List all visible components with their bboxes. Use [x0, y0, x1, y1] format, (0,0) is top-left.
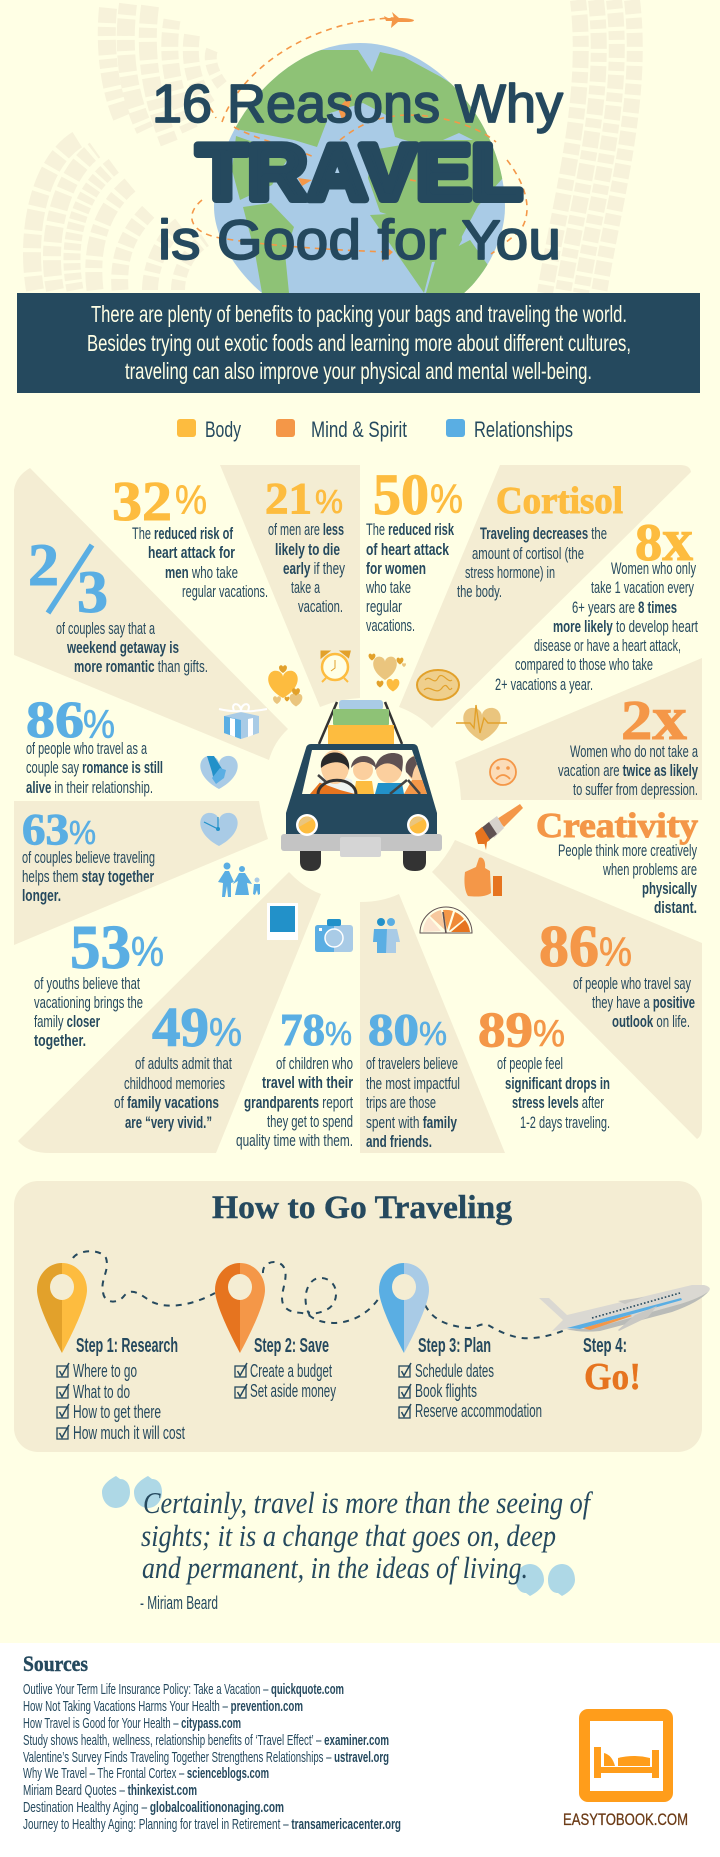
stat: 53%: [34, 914, 164, 1050]
title: TRAVEL: [197, 128, 522, 216]
stat: Cortisol: stress hormone) in: [465, 563, 555, 582]
car: left headlight: [296, 814, 318, 836]
sources: [23, 1651, 401, 1833]
sources: Sources: [23, 1651, 88, 1676]
sources: How Not Taking Vacations Harms Your Health – prevention.com: [23, 1699, 303, 1715]
stat: 49%: childhood memories: [124, 1074, 225, 1093]
stat: 80%: 80: [368, 1005, 419, 1055]
pin 3: [379, 1263, 429, 1353]
stat: 21%: likely to die: [275, 540, 340, 559]
car: bumper: [281, 834, 442, 851]
stat: 50%: 50: [373, 462, 429, 527]
icon: beige hearts: [369, 654, 406, 692]
stat: 49%: of adults admit that: [135, 1054, 232, 1073]
car: luggage blue: [339, 700, 383, 710]
stat: 8x: 8x: [635, 507, 693, 573]
dashed route 3: [425, 1305, 565, 1338]
sources: Study shows health, wellness, relationship benefits of ‘Travel Effect’ – examiner.com: [23, 1733, 389, 1749]
legend: Mind & Spirit: [311, 417, 407, 442]
stat: 86% couples: couple say romance is still: [26, 758, 163, 777]
stat: 50%: The reduced risk: [366, 520, 454, 539]
stat: 32%: 32: [112, 471, 172, 533]
stat: 49%: [114, 997, 242, 1132]
step 3: [399, 1335, 542, 1421]
stat: 86% outlook: 86: [539, 913, 599, 979]
car: license plate: [340, 837, 381, 857]
closing quotation marks: [516, 1564, 575, 1596]
quote: [102, 1476, 594, 1613]
icon: flight arrow 2: [338, 94, 352, 120]
stat: 50%: for women: [366, 559, 426, 578]
step 2: Step 2: Save: [254, 1335, 329, 1357]
stat: 78%: %: [325, 1015, 352, 1052]
car: right headlight: [407, 814, 429, 836]
sources: How Travel is Good for Your Health – citypass.com: [23, 1716, 241, 1732]
stat: 2/3: weekend getaway is: [66, 638, 179, 657]
icon: thumbs up: [464, 857, 502, 897]
stat: 32%: men who take: [165, 563, 238, 582]
icon: yellow hearts: [268, 665, 302, 706]
icon: heartbeat heart: [456, 705, 507, 741]
stat: 49%: of family vacations: [114, 1093, 219, 1112]
sunburst panels: [14, 465, 702, 1153]
stat: 63%: %: [69, 814, 96, 851]
icon: couple: [373, 918, 400, 953]
icon: brain: [417, 670, 459, 700]
stat: 80%: [366, 1005, 460, 1151]
stat: 50%: vacations.: [366, 616, 415, 635]
stat: 8x: 6+ years are 8 times: [572, 598, 677, 617]
stat: 32%: The reduced risk of: [132, 524, 233, 543]
icon: camera: [315, 919, 353, 952]
stat: 89%: stress levels after: [512, 1093, 604, 1112]
stat: 32%: %: [175, 477, 207, 523]
stat: 78%: travel with their: [262, 1073, 353, 1092]
step 1: What to do: [73, 1381, 130, 1402]
dashed route 1: [73, 1251, 215, 1306]
stat: 86% couples: [26, 692, 163, 797]
flight paths: [192, 18, 527, 254]
stat: 32%: heart attack for: [148, 543, 235, 562]
stat: 21%: 21: [265, 474, 312, 523]
stat: 50%: %: [430, 476, 463, 522]
stat: 21%: [265, 474, 345, 616]
legend: Relationships: [474, 417, 573, 442]
panel: how to go traveling: [14, 1181, 710, 1452]
step 3: Step 3: Plan: [418, 1335, 491, 1357]
car: passengers: [310, 750, 431, 794]
step 1: [57, 1335, 185, 1443]
step 1: Step 1: Research: [76, 1335, 178, 1357]
icon: gift: [219, 704, 267, 739]
icon: flight arrow 1: [382, 244, 393, 262]
stat: 78%: 78: [280, 1005, 325, 1055]
icon: family car: [281, 700, 442, 871]
stat: 89%: 89: [478, 1001, 533, 1057]
step 4: Go!: [584, 1356, 641, 1398]
intro banner: [17, 293, 700, 393]
quote: sights; it is a change that goes on, deep: [141, 1518, 556, 1553]
stat: 2/3: 3: [77, 559, 108, 625]
stat: 2x: 2x: [621, 685, 687, 753]
stat: 2/3: of couples say that a: [56, 619, 155, 638]
stat: 2/3: more romantic than gifts.: [74, 657, 208, 676]
opening quotation marks: [102, 1476, 162, 1508]
step 2: Create a budget: [250, 1360, 332, 1381]
sources: Why We Travel – The Frontal Cortex – scienceblogs.com: [23, 1766, 269, 1782]
stat: 8x: [495, 507, 698, 694]
stat: Cortisol: Cortisol: [496, 480, 623, 522]
stat: 49%: %: [209, 1011, 242, 1055]
stat: 53%: of youths believe that: [34, 974, 140, 993]
stat: 53%: together.: [34, 1031, 86, 1050]
stat: 49%: 49: [152, 997, 209, 1059]
stat: 89%: 1-2 days traveling.: [520, 1113, 610, 1132]
step 2: Set aside money: [250, 1380, 336, 1401]
stat: 86% couples: of people who travel as a: [26, 739, 147, 758]
step 1: How much it will cost: [73, 1422, 185, 1443]
car: right wheel: [403, 851, 426, 871]
stat: 32%: [112, 471, 268, 601]
step 1: How to get there: [73, 1401, 161, 1422]
title: is Good for You: [158, 208, 561, 271]
sources: Valentine’s Survey Finds Traveling Together Strengthens Relationships – ustravel.org: [23, 1750, 389, 1766]
stat: 80%: %: [419, 1015, 447, 1052]
title: 16 Reasons Why: [152, 74, 563, 134]
stat: 21%: %: [315, 483, 343, 520]
icon: airplane: [384, 12, 414, 28]
stat: 80%: spent with family: [366, 1113, 457, 1132]
stat: 89%: %: [533, 1013, 565, 1055]
stat: Creativity: [536, 806, 699, 917]
stat: 80%: of travelers believe: [366, 1054, 458, 1073]
stat: 53%: vacationing brings the: [34, 993, 143, 1012]
sources: Journey to Healthy Aging: Planning for travel in Retirement – transamericacenter.org: [23, 1817, 401, 1833]
stat: 80%: and friends.: [366, 1132, 432, 1151]
stat: 78%: of children who: [276, 1054, 353, 1073]
stat: 53%: %: [131, 928, 164, 975]
step 3: Reserve accommodation: [415, 1400, 542, 1421]
stat: 63%: of couples believe traveling: [22, 848, 155, 867]
stat: 53%: family closer: [34, 1012, 100, 1031]
icon: holding hands heart: [200, 756, 238, 789]
icon: flight arrow 3: [298, 178, 312, 186]
step 1: Where to go: [73, 1360, 137, 1381]
stat: Creativity: Creativity: [536, 806, 699, 845]
background footprints: [32, 0, 635, 293]
stat: 53%: 53: [70, 914, 131, 982]
stat: 2x: [558, 685, 698, 799]
stat: Cortisol: Traveling decreases the: [480, 524, 607, 543]
step 4: Step 4:: [583, 1335, 627, 1357]
icon: polaroid: [267, 903, 298, 940]
stat: 80%: trips are those: [366, 1093, 436, 1112]
stat: 89%: [478, 1001, 610, 1132]
stat: 89%: of people feel: [497, 1054, 563, 1073]
step 3: Schedule dates: [415, 1360, 494, 1381]
pin 1: [37, 1263, 87, 1353]
stat: Cortisol: amount of cortisol (the: [472, 544, 584, 563]
sources: Destination Healthy Aging – globalcoalitiononaging.com: [23, 1800, 284, 1816]
stat: 8x: 2+ vacations a year.: [495, 675, 593, 694]
stat: 78%: grandparents report: [244, 1093, 353, 1112]
car: windshield: [302, 750, 427, 794]
step 2: [235, 1335, 336, 1401]
sources: Miriam Beard Quotes – thinkexist.com: [23, 1783, 197, 1799]
title: [152, 74, 563, 271]
stat: 49%: are “very vivid.”: [125, 1113, 212, 1132]
stat: 63%: [22, 805, 155, 905]
icon: airplane: [539, 1285, 710, 1332]
car: left wheel: [300, 851, 321, 871]
stat: 78%: they get to spend: [267, 1112, 353, 1131]
icon: paint brush: [475, 804, 523, 850]
stat: 78%: quality time with them.: [236, 1131, 353, 1150]
quote: Certainly, travel is more than the seeing of: [143, 1485, 594, 1520]
stat: 86% outlook: they have a positive: [592, 993, 695, 1012]
legend: [177, 417, 573, 442]
stat: 50%: who take: [365, 578, 411, 597]
stat: Cortisol: [457, 480, 623, 601]
heading: How to Go Traveling: [212, 1190, 513, 1226]
icon: alarm clock: [322, 652, 349, 682]
logo: easytobook: [563, 1709, 688, 1829]
stat: 21%: vacation.: [298, 597, 343, 616]
stat: 63%: 63: [22, 805, 69, 854]
step 4: [583, 1335, 641, 1398]
stat: 50%: of heart attack: [366, 540, 449, 559]
car: body: [286, 744, 437, 835]
stat: 21%: take a: [291, 578, 320, 597]
stat: Cortisol: the body.: [457, 582, 502, 601]
icon: family: [218, 862, 260, 897]
stat: 50%: regular: [366, 597, 402, 616]
stat: 63%: helps them stay together: [22, 867, 154, 886]
stat: 21%: early if they: [283, 559, 345, 578]
stat: 86% outlook: outlook on life.: [612, 1012, 690, 1031]
quote: and permanent, in the ideas of living.: [142, 1550, 528, 1585]
icon: heart clock: [200, 813, 238, 846]
sources: Outlive Your Term Life Insurance Policy: Take a Vacation – quickquote.com: [23, 1682, 344, 1698]
stat: 78%: [236, 1005, 353, 1150]
stat: Creativity: distant.: [654, 898, 697, 917]
stat: 86% couples: 86: [26, 692, 84, 749]
globe: [210, 40, 510, 295]
quote: - Miriam Beard: [140, 1593, 218, 1613]
stat: 2/3: 2: [28, 532, 59, 598]
stat: 89%: significant drops in: [505, 1074, 610, 1093]
legend: Body: [205, 417, 241, 442]
car: roof rack: [319, 702, 402, 744]
dashed route 2: [263, 1262, 379, 1323]
stat: 32%: regular vacations.: [182, 582, 268, 601]
stat: 86% couples: alive in their relationship.: [26, 778, 153, 797]
pin 2: [215, 1263, 265, 1353]
icon: sad face: [490, 759, 516, 785]
stat: 2/3: [28, 532, 208, 676]
stat: 21%: of men are less: [268, 520, 344, 539]
stat: 86% couples: %: [83, 703, 115, 747]
stat: 63%: longer.: [22, 886, 61, 905]
icon: stress gauge: [420, 907, 472, 933]
stat: 86% outlook: [539, 913, 695, 1031]
stat: 86% outlook: %: [599, 929, 632, 975]
step 3: Book flights: [415, 1380, 477, 1401]
car: luggage yellow: [328, 725, 394, 744]
stat: 80%: the most impactful: [366, 1074, 460, 1093]
stat: 50%: [365, 462, 463, 635]
car: luggage green: [333, 709, 389, 725]
